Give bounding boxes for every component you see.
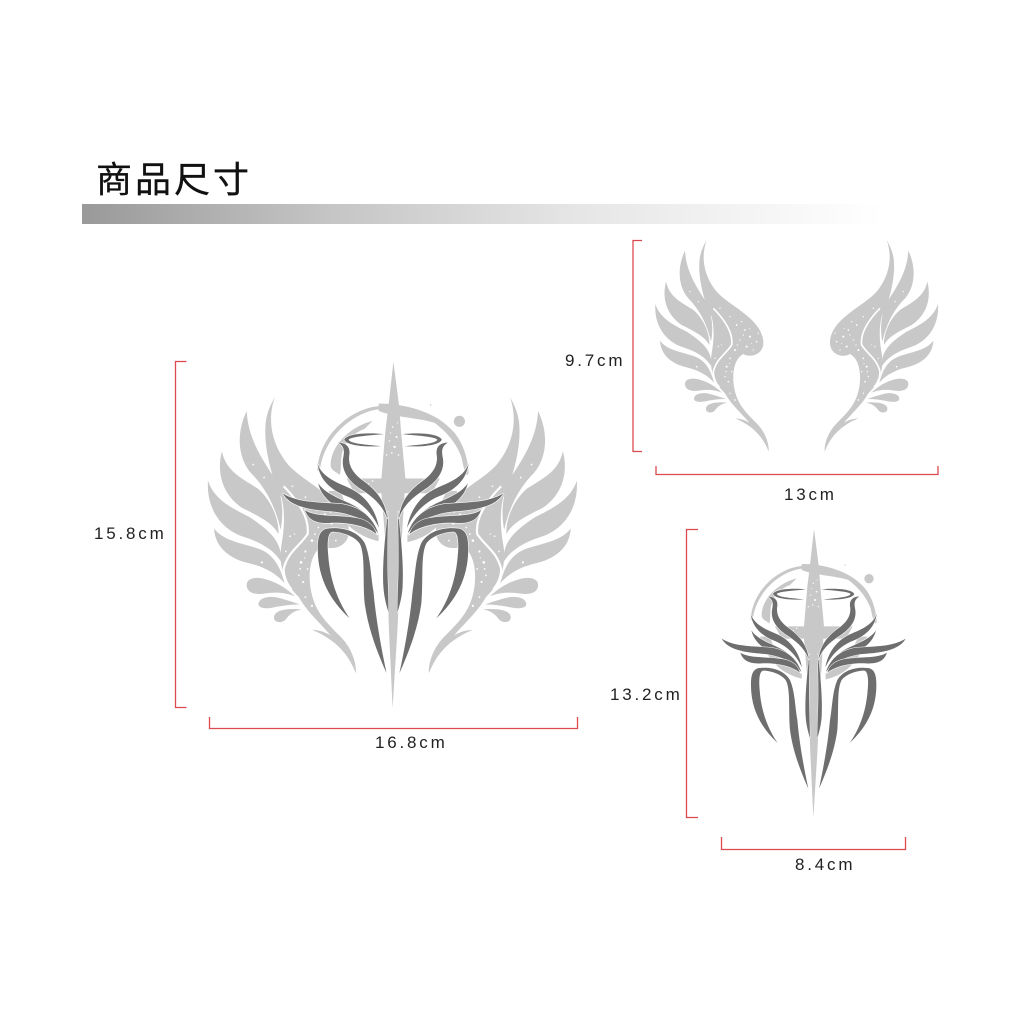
large wings [208,397,577,673]
label: 15.8cm: 15.8cm [94,524,167,543]
title gradient bar [82,204,882,224]
label: 8.4cm: 8.4cm [795,855,855,874]
figure: large wings and cross [208,362,577,708]
figure: small cross emblem [722,529,906,818]
title: 商品尺寸 [96,159,252,200]
bracket: 13.2cm height [686,530,698,818]
label: 13.2cm: 13.2cm [610,685,683,704]
bracket: 9.7cm height [633,240,642,452]
bracket: 15.8cm height [176,362,186,708]
large cross emblem [283,362,503,708]
label: 13cm: 13cm [784,485,837,504]
bracket: 13cm width [656,466,938,474]
bracket: 16.8cm width [210,717,578,728]
label: 9.7cm: 9.7cm [565,351,625,370]
figure: wings only [655,240,938,452]
bracket: 8.4cm width [722,837,906,850]
label: 16.8cm: 16.8cm [375,733,448,752]
